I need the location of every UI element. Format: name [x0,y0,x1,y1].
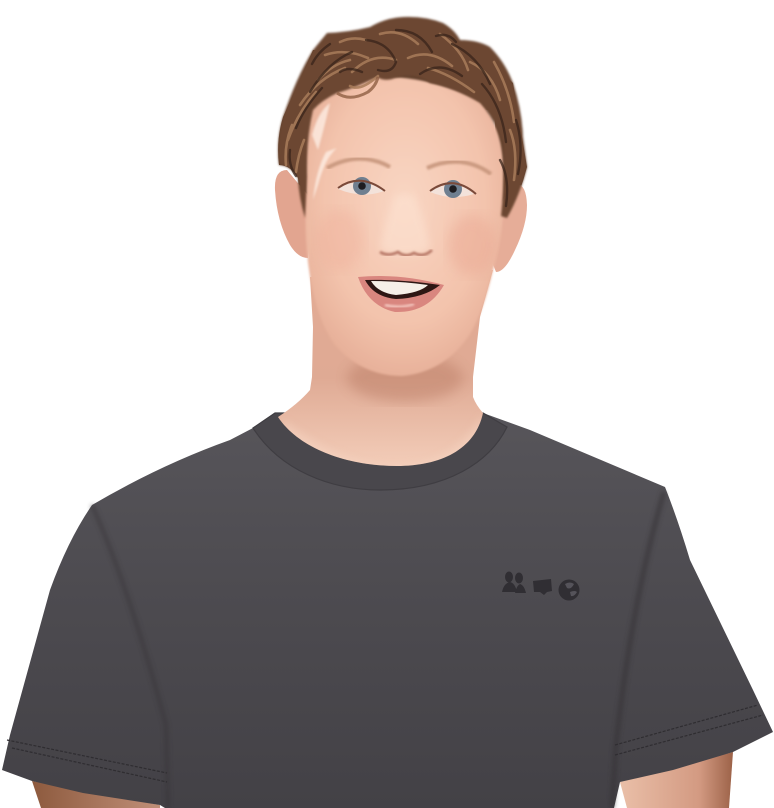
sleeve seam left [92,505,168,808]
right ear [492,184,527,272]
left ear [275,170,312,258]
mouth [358,276,444,312]
hair back [278,50,527,218]
left hem stitching [7,740,167,782]
right eyebrow [427,162,491,174]
nose [380,195,432,255]
hair curls light [286,32,515,180]
face [305,76,504,376]
icon: people [502,572,526,593]
hair curls dark [290,30,521,206]
left eye [338,177,385,195]
icon: messages [533,579,552,595]
right hem stitching [615,705,763,755]
cheek colour [326,216,360,262]
hair [278,17,527,218]
right eye [430,180,476,198]
forehead temple highlights [312,103,337,200]
icon: globe [558,580,580,600]
left eyebrow [327,159,390,168]
neck shadow [284,360,480,466]
arms [32,752,733,808]
hair fringe [337,77,378,97]
shirt icons [502,572,580,600]
t-shirt [2,413,773,808]
shirt collar [253,413,507,490]
neck [278,270,493,470]
sleeve seam right [612,492,664,808]
